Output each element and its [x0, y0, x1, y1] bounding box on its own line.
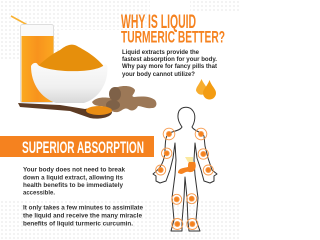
icon: wooden spoon with powder — [18, 103, 112, 119]
icon: oil drops — [196, 79, 216, 100]
intro paragraph — [122, 49, 218, 78]
human body figure — [153, 107, 217, 231]
illustration: turmeric juice, bowl, spoon and root — [11, 16, 156, 119]
body paragraph 1: down a liquid extract, allowing its — [23, 174, 123, 181]
body outline — [153, 107, 217, 231]
body paragraph 1: health benefits to be immediately — [23, 182, 123, 189]
body paragraph 2: It only takes a few minutes to assimilate — [23, 205, 143, 212]
banner — [0, 136, 154, 157]
infographic canvas — [0, 1, 239, 239]
banner heading: SUPERIOR ABSORPTION — [22, 139, 144, 157]
icon: turmeric powder mound — [35, 45, 106, 78]
background dot texture — [0, 0, 240, 240]
body paragraph 1: accessible. — [23, 190, 55, 197]
title — [121, 12, 225, 46]
body paragraph 2: the liquid and receive the many miracle — [23, 213, 142, 220]
icon: white bowl — [31, 63, 108, 103]
intro paragraph: Liquid extracts provide the — [122, 49, 199, 56]
icon: straw — [11, 16, 34, 35]
intro paragraph: your body cannot utilize? — [122, 71, 195, 78]
icon: stomach — [178, 157, 196, 174]
body paragraph 2 — [23, 205, 143, 227]
intro paragraph: Why pay more for fancy pills that — [122, 63, 218, 70]
body paragraph 1: Your body does not need to break — [23, 166, 125, 173]
joint markers — [156, 128, 213, 230]
icon: ginger root — [92, 86, 156, 112]
icon: glass of juice — [20, 24, 54, 102]
body paragraph 1 — [23, 166, 125, 197]
intro paragraph: fastest absorption for your body. — [122, 56, 217, 63]
body paragraph 2: benefits of liquid turmeric curcumin. — [23, 220, 133, 227]
